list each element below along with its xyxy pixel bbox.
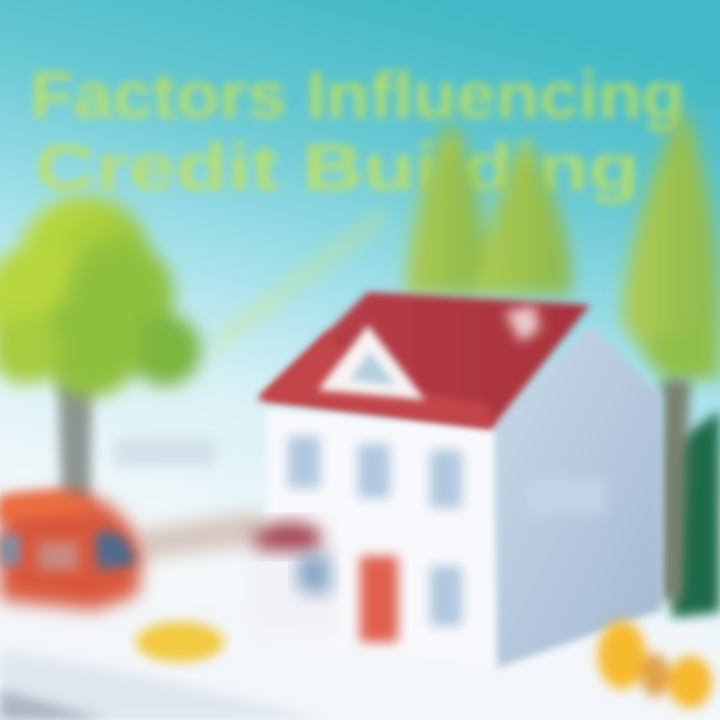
rising arrow line	[215, 215, 385, 345]
coins right	[598, 621, 712, 708]
tree trunk behind house	[660, 380, 690, 600]
title: Credit Building	[35, 130, 640, 204]
side wall sign	[525, 478, 605, 514]
house front wall	[268, 410, 497, 665]
tree trunk	[58, 380, 92, 505]
title	[30, 58, 685, 204]
distant fence and buildings	[140, 510, 260, 560]
dormer window	[318, 325, 425, 400]
red car	[0, 492, 142, 610]
roof chimney highlight	[505, 305, 540, 342]
ground road	[0, 600, 720, 720]
faint chart label left	[115, 438, 215, 466]
main house	[258, 292, 662, 668]
red door	[360, 556, 398, 642]
house side wall	[495, 325, 662, 668]
tree canopy	[0, 196, 201, 397]
small house	[252, 522, 338, 640]
left tree	[0, 196, 201, 505]
coin left	[136, 622, 224, 662]
background poplar trees	[405, 105, 720, 385]
dark green hedge	[672, 410, 720, 618]
title: Factors Influencing	[30, 58, 685, 132]
upper windows	[288, 436, 462, 626]
roof	[258, 292, 590, 428]
